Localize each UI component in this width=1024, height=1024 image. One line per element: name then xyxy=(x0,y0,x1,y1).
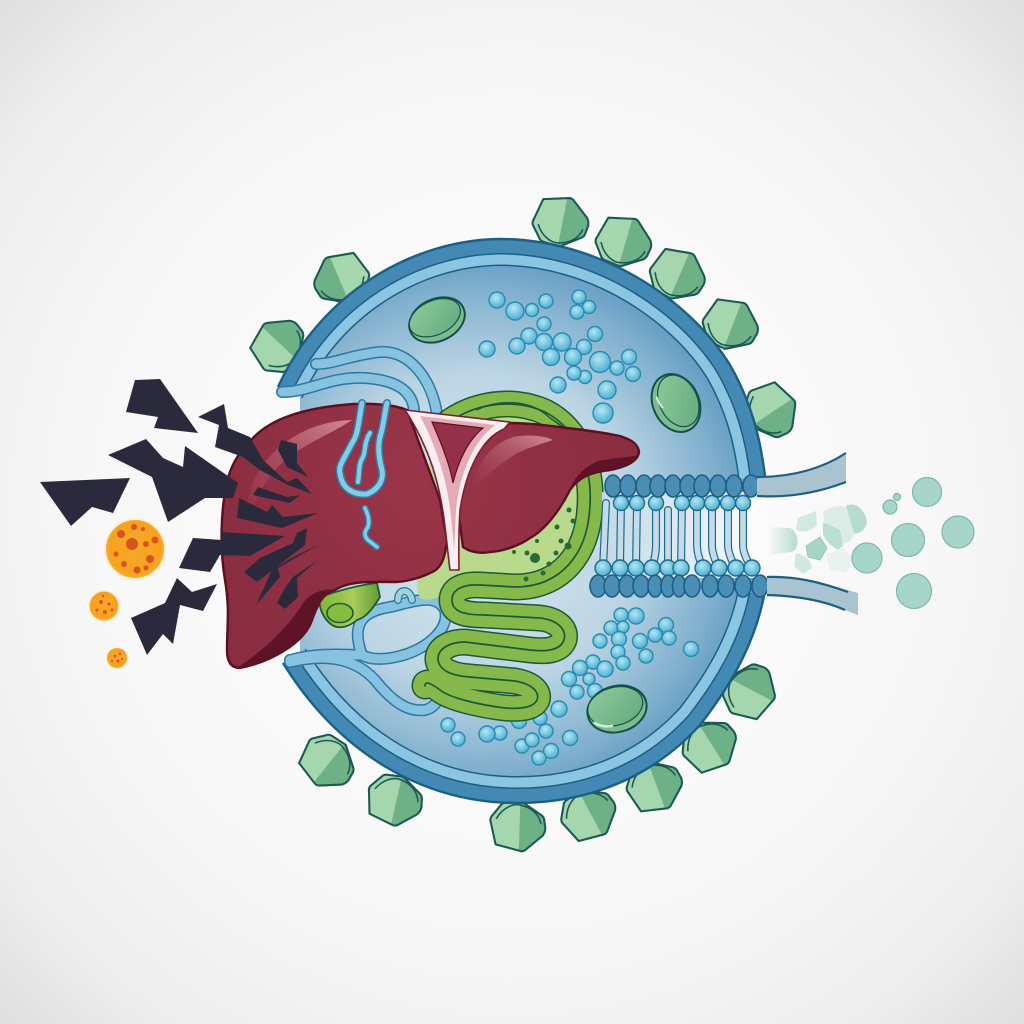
endoplasmic reticulum upper tubes xyxy=(282,352,437,414)
ligament inner triangle xyxy=(432,422,483,483)
orange ball large xyxy=(104,518,166,580)
inner lipid heads xyxy=(595,496,760,576)
orange ball small xyxy=(106,647,128,669)
shard entering liver xyxy=(198,404,312,494)
outer lipid heads top row xyxy=(605,475,759,497)
green organelle blob xyxy=(417,394,603,600)
lipid bilayer membrane xyxy=(590,475,769,597)
cell wall lower arc xyxy=(283,596,764,803)
bilayer interior xyxy=(602,492,769,578)
liver left lobe underside xyxy=(238,590,335,667)
shard top xyxy=(126,379,198,433)
icon: spike bottom 1 xyxy=(623,758,686,814)
icon: spike lower right 1 xyxy=(713,654,786,728)
icon: spike bottom left 1 xyxy=(359,766,430,833)
falciform ligament xyxy=(405,410,510,570)
icon: spike lower right 2 xyxy=(675,712,744,778)
orange ball medium xyxy=(88,590,120,622)
liver xyxy=(222,404,639,668)
endoplasmic reticulum lower tubes and loop xyxy=(290,591,446,710)
blue bile vessel loop on liver xyxy=(340,403,387,547)
icon: spike bottom 2 xyxy=(555,783,622,845)
lipid tails xyxy=(603,503,752,568)
cell body xyxy=(278,239,765,803)
liver crack d xyxy=(244,528,307,582)
icon: spike right xyxy=(734,374,807,448)
icon: spike bottom left 2 xyxy=(291,725,364,798)
cell wall outer outline xyxy=(278,239,765,803)
icon: spike top left 1 xyxy=(309,250,374,309)
shard bottom xyxy=(131,578,217,655)
liver crack b xyxy=(253,487,300,503)
green organelle disc right xyxy=(642,366,710,440)
blue ribosome bubbles upper cluster xyxy=(479,290,640,423)
green folded mitochondrion ribbon xyxy=(425,403,590,708)
green dots xyxy=(512,508,576,582)
icon: spike top 1 xyxy=(533,198,588,246)
dissolving fragments xyxy=(768,504,867,574)
gallbladder xyxy=(320,583,380,627)
blue ribosome bubbles lower cluster xyxy=(441,608,698,765)
icon: spike top 4 xyxy=(699,297,762,354)
icon: spike top 3 xyxy=(645,246,710,305)
liver crack a xyxy=(278,440,308,477)
liver right lobe xyxy=(458,423,639,553)
pale teal vesicles xyxy=(852,478,974,608)
liver crack c xyxy=(237,498,318,528)
cell cytoplasm xyxy=(278,239,765,803)
icon: spike bottom 3 xyxy=(485,796,550,855)
ligament pink stripe xyxy=(420,416,495,550)
icon: spike top left 2 xyxy=(244,309,314,382)
green organelle disc lower xyxy=(582,679,652,739)
black shattered shards xyxy=(40,379,320,655)
icon: spike top 2 xyxy=(594,216,653,269)
shard center large xyxy=(108,439,238,522)
liver left lobe highlight xyxy=(246,420,352,525)
outer lipid heads bottom row xyxy=(590,575,768,597)
liver crack e xyxy=(256,544,320,605)
cell wall upper arc xyxy=(278,239,765,476)
shard middle xyxy=(179,532,285,572)
shard far left xyxy=(40,478,130,526)
liver crack f xyxy=(277,560,318,609)
upper outflow channel xyxy=(757,453,846,496)
liver left lobe xyxy=(222,404,447,668)
liver right lobe highlight xyxy=(475,436,553,487)
green organelle disc upper left xyxy=(402,289,472,351)
liver right lobe underside xyxy=(567,455,638,497)
surface spike proteins xyxy=(244,198,807,855)
lower outflow channel xyxy=(767,577,858,615)
